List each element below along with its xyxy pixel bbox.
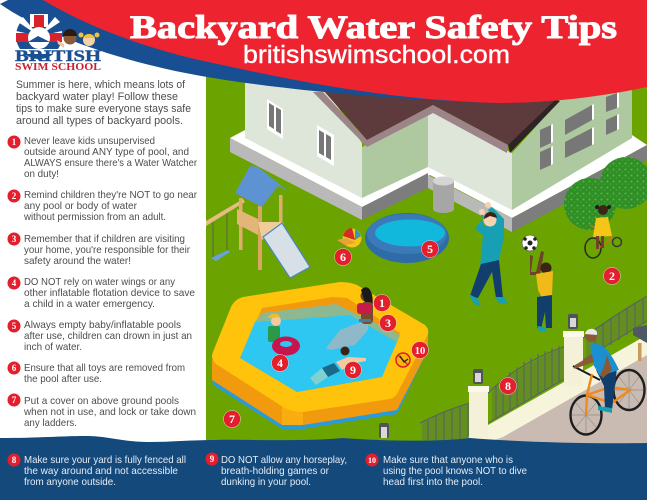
- bicycle: [570, 366, 644, 434]
- slide: [263, 223, 310, 278]
- pool outer wall: [212, 282, 428, 429]
- water tank: [433, 176, 454, 213]
- tip 4: [8, 276, 195, 310]
- tip 3: safety around the water!: [24, 256, 131, 267]
- tip 5: after use, children can drown in just an: [24, 331, 192, 342]
- tip 7: [8, 394, 196, 429]
- intro text: [16, 79, 191, 127]
- badge 2: [604, 268, 620, 284]
- rider: [574, 329, 619, 413]
- tip 7: 7: [12, 395, 17, 405]
- tip 8: Make sure your yard is fully fenced all: [24, 455, 186, 466]
- tip 5: 5: [12, 321, 17, 331]
- house roof: [313, 90, 560, 153]
- title: Backyard Water Safety Tips: [130, 10, 617, 46]
- tip 10: using the pool knows NOT to dive: [383, 466, 527, 477]
- tip 3: 3: [12, 234, 17, 244]
- pool inner wall: [240, 297, 400, 392]
- bushes: [564, 157, 647, 230]
- tip 5: Always empty baby/inflatable pools: [24, 320, 181, 331]
- mailbox: [633, 325, 647, 361]
- badge 1: [374, 294, 390, 312]
- badge 6: [334, 248, 352, 266]
- badge 6: 6: [340, 250, 346, 264]
- badge 10: [412, 342, 428, 358]
- tip 6: the pool after use.: [24, 374, 102, 385]
- tip 7: Put a cover on above ground pools: [24, 396, 179, 407]
- girl on tricycle: [585, 205, 622, 258]
- badge 5: [422, 240, 438, 258]
- tip 10: [366, 454, 527, 488]
- header banner: [0, 0, 647, 103]
- tip 9: dunking in your pool.: [221, 477, 311, 488]
- tower roof: [235, 166, 288, 207]
- badge 3: 3: [385, 316, 391, 330]
- tip 7: any ladders.: [24, 418, 77, 429]
- soccer ball: [522, 235, 538, 251]
- tip 8: the way around and not accessible: [24, 466, 178, 477]
- tip 1: [8, 136, 197, 180]
- intro text: Summer is here, which means lots of: [16, 79, 186, 91]
- tip 3: [8, 232, 191, 267]
- tip 2: any pool or body of water: [24, 201, 138, 212]
- tip 5: [8, 320, 192, 353]
- logo: [14, 13, 102, 73]
- tip 9: breath-holding games or: [221, 466, 330, 477]
- badge 3: [380, 314, 396, 332]
- tip 8: 8: [12, 455, 17, 465]
- cyclist: [570, 329, 644, 434]
- tip 2: without permission from an adult.: [23, 212, 166, 223]
- tip 4: a child in a water emergency.: [24, 299, 155, 310]
- logo wordmark Swim School: SWIM SCHOOL: [15, 62, 101, 73]
- badge 8: 8: [505, 379, 511, 393]
- red banner: [43, 0, 647, 103]
- woman sitting at pool edge: [326, 287, 373, 350]
- playset: [206, 166, 310, 278]
- pool water: [240, 315, 397, 392]
- footer band: [0, 436, 647, 500]
- intro text: around all types of backyard pools.: [16, 115, 183, 127]
- road and curb: [468, 335, 647, 445]
- tip 10: Make sure that anyone who is: [383, 455, 513, 466]
- windows: [267, 92, 619, 170]
- tip 2: 2: [12, 191, 17, 201]
- tower: [237, 195, 284, 270]
- tip 7: when not in use, and lock or take down: [23, 407, 196, 418]
- tip 10: 10: [368, 456, 376, 465]
- tip 9: 9: [210, 454, 215, 464]
- lawn background: [206, 65, 647, 445]
- badge 7: 7: [229, 412, 235, 426]
- tip 2: Remind children they're NOT to go near: [24, 190, 198, 201]
- tip 1: outside around ANY type of pool, and: [24, 147, 189, 158]
- child with ball: [530, 251, 553, 331]
- tip 9: [206, 452, 347, 488]
- tip 6: Ensure that all toys are removed from: [24, 363, 185, 374]
- intro text: backyard water play! Follow these: [16, 91, 178, 103]
- beach ball and toys: [337, 228, 362, 248]
- badge 1: 1: [379, 296, 385, 310]
- tip 1: on duty!: [24, 169, 59, 180]
- tip 1: Never leave kids unsupervised: [24, 136, 155, 147]
- swing: [206, 199, 245, 261]
- pool shallow band: [255, 304, 400, 342]
- badge 2: 2: [609, 269, 615, 283]
- tip 4: 4: [12, 278, 17, 288]
- baby pool: [365, 213, 449, 263]
- badge 10: 10: [415, 346, 425, 357]
- no-diving sign: [396, 353, 410, 367]
- tip 1: 1: [12, 137, 17, 147]
- tip 4: other inflatable flotation device to save: [24, 288, 195, 299]
- badge 4: [272, 354, 288, 372]
- tip 1: ALWAYS ensure there's a Water Watcher: [24, 158, 197, 169]
- tip 4: DO NOT rely on water wings or any: [24, 277, 176, 288]
- house: [230, 70, 647, 232]
- logo kids: [57, 29, 100, 48]
- tip 10: head first into the pool.: [383, 477, 483, 488]
- tip 8: from anyone outside.: [24, 477, 116, 488]
- fence posts and lamps: [379, 314, 584, 438]
- lifebuoy flag: [14, 13, 64, 59]
- website address: britishswimschool.com: [243, 41, 510, 69]
- tip 6: 6: [12, 363, 17, 373]
- badge 7: [224, 410, 240, 428]
- tip 3: your home, you're responsible for their: [24, 245, 191, 256]
- tip 3: Remember that if children are visiting: [24, 234, 185, 245]
- badge 4: 4: [277, 356, 283, 370]
- badge 9: 9: [350, 363, 356, 377]
- house foundation: [230, 130, 647, 232]
- tip 5: inch of water.: [24, 342, 82, 353]
- intro text: tips to make sure everyone stays safe: [16, 103, 191, 115]
- tip 9: DO NOT allow any horseplay,: [221, 455, 347, 466]
- boy swimming: [310, 346, 366, 385]
- fence: [420, 296, 647, 440]
- badge 9: [344, 362, 362, 378]
- badge 5: 5: [427, 242, 433, 256]
- big pool: [212, 282, 428, 429]
- tip 6: [8, 362, 185, 385]
- adult playing ball: [469, 202, 508, 306]
- logo wordmark British: BRITISH: [15, 48, 102, 65]
- tip 8: [8, 454, 186, 488]
- house walls: [245, 70, 632, 210]
- badge 8: [500, 378, 516, 394]
- blue swoosh: [0, 0, 497, 103]
- girl with swim ring: [268, 313, 300, 356]
- tip 2: [8, 190, 198, 223]
